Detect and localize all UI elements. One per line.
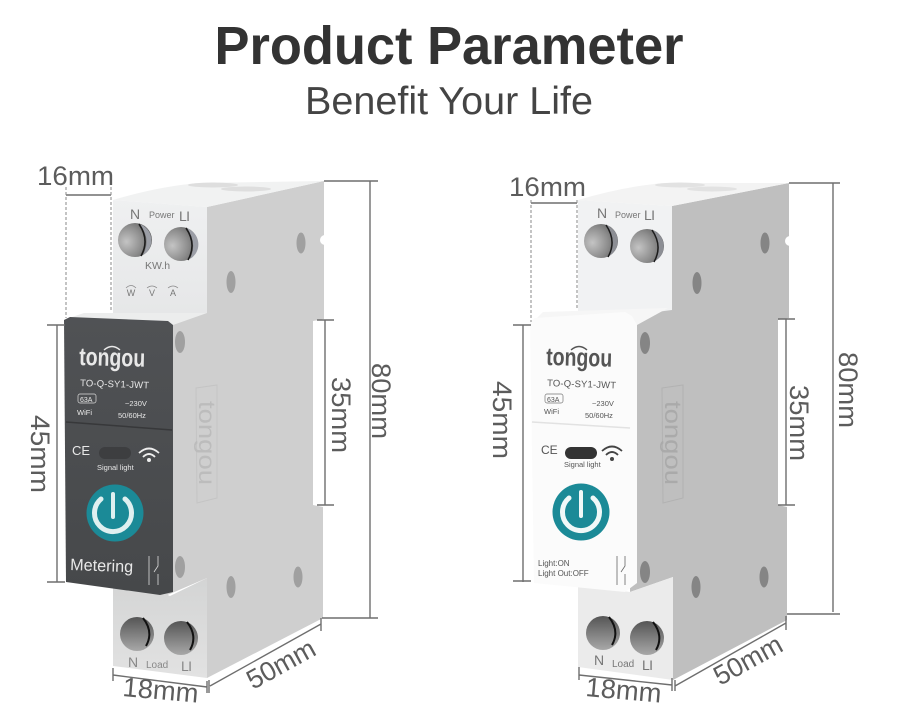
side rail notch [320, 235, 330, 245]
top labels: N [130, 206, 140, 222]
top labels: W [127, 288, 136, 298]
signal light [565, 447, 597, 459]
dimension labels: left device: 35mm [326, 377, 356, 453]
side body [630, 183, 789, 680]
panel printed text: tongou [79, 343, 146, 373]
dimension labels: right device: 16mm [509, 172, 586, 202]
panel printed text: 50/60Hz [585, 411, 613, 420]
side body [165, 181, 324, 678]
dark front panel [64, 317, 173, 595]
bottom terminals [586, 616, 664, 655]
panel printed text: TO-Q-SY1-JWT [547, 378, 616, 391]
top labels: LI [644, 207, 655, 223]
top labels [127, 206, 190, 298]
top face [578, 183, 789, 206]
panel printed text: ~230V [592, 399, 614, 408]
panel printed text: 63A [80, 397, 93, 404]
panel printed text: WiFi [77, 408, 92, 417]
panel printed text: Signal light [97, 463, 135, 472]
bottom labels: Load [146, 660, 168, 671]
panel printed text: ~230V [125, 399, 147, 408]
panel printed text: TO-Q-SY1-JWT [80, 378, 149, 391]
signal light [99, 447, 131, 459]
side rail notch [785, 236, 795, 246]
panel printed text: tongou [546, 343, 613, 373]
top labels [597, 205, 655, 223]
dimension labels: left device: 18mm [121, 672, 200, 709]
bottom labels: N [594, 652, 604, 668]
dimension lines: left device [47, 181, 378, 693]
top labels: N [597, 205, 607, 221]
bottom terminals [120, 617, 198, 655]
dimension labels: left device: 16mm [37, 161, 114, 191]
subtitle: Benefit Your Life [305, 80, 593, 123]
side mounting holes [175, 232, 306, 598]
panel lip [530, 308, 668, 325]
top labels: LI [179, 208, 190, 224]
wifi icon [139, 448, 159, 462]
embossed side logo [662, 385, 683, 503]
bottom labels [594, 652, 653, 673]
top terminals [118, 223, 198, 261]
title: Product Parameter [214, 16, 684, 76]
top labels: V [149, 288, 155, 298]
panel printed text: Signal light [564, 460, 602, 469]
dimension labels: right device: 80mm [833, 352, 863, 428]
bottom labels: LI [642, 657, 653, 673]
white front panel [530, 312, 637, 592]
upper front face [113, 200, 207, 313]
bottom labels [128, 654, 192, 674]
power button [552, 484, 610, 540]
top terminals [584, 224, 664, 263]
panel printed text: 63A [547, 397, 560, 404]
panel printed text: Light Out:OFF [538, 569, 589, 578]
dimension labels: right device: 35mm [784, 385, 814, 461]
panel printed text: CE [72, 443, 90, 458]
left device: dark metering breaker: tongou [194, 401, 220, 485]
top labels: Power [149, 210, 175, 220]
panel printed text: 50/60Hz [118, 411, 146, 420]
bottom labels: LI [181, 658, 192, 674]
panel printed text: CE [541, 443, 558, 457]
dimension labels: right device [487, 172, 863, 709]
panel printed text: Metering [70, 556, 133, 576]
top labels: Power [615, 210, 641, 220]
dimension labels: right device: 18mm [584, 672, 663, 709]
upper front face [578, 200, 672, 322]
panel printed text: Light:ON [538, 559, 570, 568]
dimension labels: left device [25, 161, 396, 709]
circuit symbol [617, 556, 625, 585]
dimension lines: right device [513, 183, 840, 691]
left device: dark metering breaker [64, 181, 330, 678]
dimension labels: left device: 50mm [241, 633, 321, 695]
dimension labels: right device: 50mm [708, 629, 788, 691]
power button [86, 484, 144, 542]
dimension labels: left device: 45mm [25, 415, 55, 493]
lower front face [113, 570, 207, 678]
dimension labels: right device: 45mm [487, 381, 517, 459]
top labels: A [170, 288, 176, 298]
top face [113, 181, 324, 207]
panel printed text [538, 343, 616, 578]
lower front face [578, 577, 673, 680]
panel printed text [70, 343, 149, 576]
meter arcs [126, 286, 178, 288]
circuit symbol [149, 556, 158, 585]
side mounting holes [640, 232, 770, 598]
dimension labels: left device: 80mm [366, 363, 396, 439]
panel printed text: WiFi [544, 407, 559, 416]
right device: white breaker: tongou [660, 401, 686, 485]
wifi icon [602, 446, 622, 461]
bottom labels: Load [612, 659, 634, 670]
top labels: KW.h [145, 260, 170, 272]
panel lip [66, 313, 207, 325]
embossed side logo [196, 385, 217, 503]
right device: white breaker [530, 182, 795, 680]
bottom labels: N [128, 654, 138, 670]
